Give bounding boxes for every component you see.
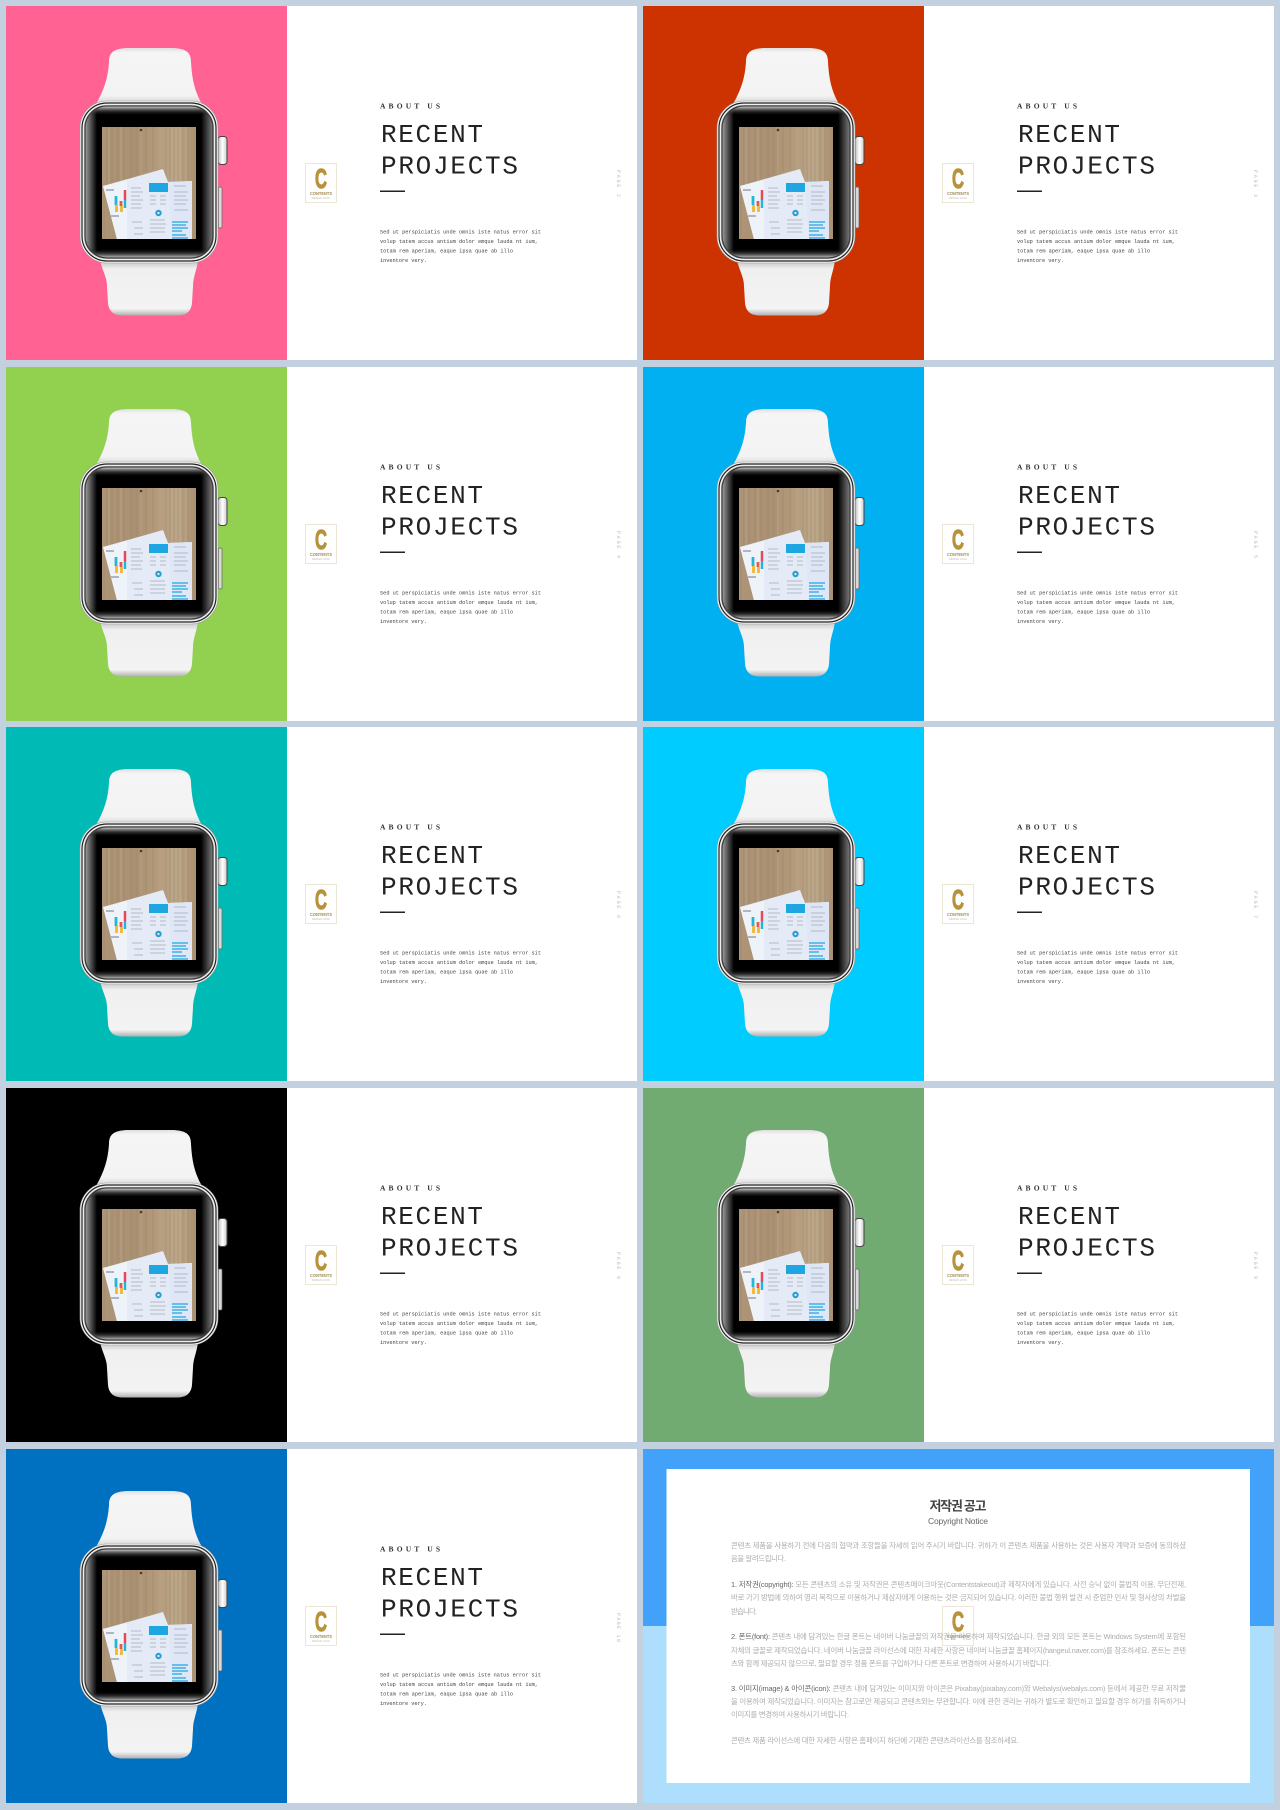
icon: logo: C xyxy=(952,163,964,194)
heading: RECENT xyxy=(1018,120,1120,150)
panel: black watch slide xyxy=(6,1088,637,1442)
panel: blue watch slide xyxy=(643,367,1274,721)
icon: logo: DESIGN LOOK xyxy=(312,1278,330,1282)
icon: logo: CONTENTS xyxy=(947,912,969,917)
body text xyxy=(1017,1312,1178,1346)
body text: Sed ut perspiciatis unde omnis iste natus error sit xyxy=(380,1672,541,1678)
colour block xyxy=(643,1088,924,1442)
page number: PAGE 5 xyxy=(1252,531,1258,558)
page number: PAGE 6 xyxy=(615,891,621,918)
clause 1: copyright: 바로 가기 방법에 의하여 영리 목적으로 이용하거나 제삼자에게 이용하는 것은 금지되어 있습니다. 이러한 불법 행위 발견 시 준엄한 민사 및 형사상의 처벌을 xyxy=(731,1593,1186,1602)
body text: volup tatem accus antium dolor emque lauda nt ium, xyxy=(1017,1321,1175,1327)
icon: logo: CONTENTS xyxy=(310,552,332,557)
colour block xyxy=(6,367,287,721)
icon: logo: DESIGN LOOK xyxy=(949,557,967,561)
body text xyxy=(380,1672,541,1707)
white content area xyxy=(287,1449,637,1803)
heading: RECENT xyxy=(381,120,483,150)
white content area xyxy=(287,6,637,360)
label: ABOUT US xyxy=(380,822,440,832)
panel: pink watch slide xyxy=(6,6,637,360)
body text: inventore very. xyxy=(380,258,427,264)
icon: logo: CONTENTS xyxy=(947,1634,969,1639)
body text: totam rem aperiam, eaque ipsa quae ab illo xyxy=(1017,1330,1150,1336)
heading: PROJECTS xyxy=(1018,152,1155,182)
body text: totam rem aperiam, eaque ipsa quae ab illo xyxy=(380,1692,513,1698)
icon: logo xyxy=(306,1606,336,1646)
intro paragraph xyxy=(731,1541,1186,1563)
body text: volup tatem accus antium dolor emque lauda nt ium, xyxy=(380,960,538,966)
page number: PAGE 9 xyxy=(1252,1252,1258,1279)
colour block xyxy=(643,367,924,721)
notice card xyxy=(666,1469,1250,1783)
body text: inventore very. xyxy=(1017,619,1064,625)
body text: inventore very. xyxy=(380,1340,427,1346)
notice subtitle: Copyright Notice xyxy=(928,1516,988,1526)
body text xyxy=(380,1312,541,1346)
icon: logo: CONTENTS xyxy=(310,1273,332,1278)
heading xyxy=(381,1202,518,1264)
label: ABOUT US xyxy=(1017,102,1077,110)
body text: totam rem aperiam, eaque ipsa quae ab illo xyxy=(380,610,513,616)
background bottom band xyxy=(643,1626,1274,1803)
rule xyxy=(1017,1272,1042,1274)
body text xyxy=(380,590,541,625)
icon: logo: DESIGN LOOK xyxy=(949,196,967,200)
body text: Sed ut perspiciatis unde omnis iste natus error sit xyxy=(380,590,541,596)
body text: inventore very. xyxy=(380,619,427,625)
clause 1: copyright: 받습니다. xyxy=(731,1607,757,1616)
icon: smartwatch xyxy=(717,1130,864,1398)
clause 2: font: 2. 폰트(font): 콘텐츠 내에 담겨있는 한글 폰트는 네이버 나눔글꼴의 저작권을 이용하여 제작되었습니다. 한글 외의 모든 폰트는 Windows System에 포함된 xyxy=(731,1632,1186,1641)
icon: smartwatch xyxy=(80,769,227,1036)
rule xyxy=(1017,552,1042,553)
icon: logo: CONTENTS xyxy=(310,191,332,196)
label: ABOUT US xyxy=(380,102,440,110)
body text: volup tatem accus antium dolor emque lauda nt ium, xyxy=(380,1321,538,1327)
white content area xyxy=(924,1088,1274,1442)
white content area xyxy=(924,727,1274,1081)
white content area xyxy=(924,367,1274,721)
heading: RECENT xyxy=(1018,841,1120,871)
icon: logo: CONTENTS xyxy=(947,552,969,557)
panel: cyan watch slide xyxy=(643,727,1274,1081)
body text xyxy=(380,950,541,985)
rule xyxy=(380,1634,405,1635)
colour block xyxy=(6,6,287,360)
icon: logo: DESIGN LOOK xyxy=(312,917,330,921)
heading: PROJECTS xyxy=(381,512,518,542)
icon: logo xyxy=(306,884,336,924)
body text: totam rem aperiam, eaque ipsa quae ab illo xyxy=(380,1330,513,1336)
notice title: 저작권 공고 xyxy=(930,1498,987,1514)
colour block xyxy=(643,727,924,1081)
body text: totam rem aperiam, eaque ipsa quae ab illo xyxy=(1017,610,1150,616)
body text xyxy=(380,230,541,264)
page number: PAGE 3 xyxy=(1252,170,1258,197)
white content area xyxy=(924,6,1274,360)
page number: PAGE 10 xyxy=(615,1613,621,1642)
rule xyxy=(380,552,405,553)
rule xyxy=(380,912,405,913)
panel: dark blue watch slide xyxy=(6,1449,637,1803)
heading: RECENT xyxy=(381,1202,483,1232)
page number: PAGE 7 xyxy=(1252,891,1258,918)
heading: PROJECTS xyxy=(381,1594,518,1624)
body text: inventore very. xyxy=(1017,979,1064,985)
label: ABOUT US xyxy=(1017,462,1077,472)
label: ABOUT US xyxy=(1017,1184,1077,1192)
heading xyxy=(381,1563,518,1624)
icon: logo: DESIGN LOOK xyxy=(312,196,330,200)
body text: volup tatem accus antium dolor emque lauda nt ium, xyxy=(1017,239,1175,245)
body text: volup tatem accus antium dolor emque lauda nt ium, xyxy=(380,239,538,245)
icon: smartwatch xyxy=(717,769,864,1036)
panel: orange watch slide xyxy=(643,6,1274,360)
clause 1: copyright xyxy=(731,1580,1186,1616)
heading: PROJECTS xyxy=(381,1234,518,1264)
page number: PAGE 2 xyxy=(615,170,621,197)
icon: logo xyxy=(942,1245,974,1284)
closing note: 콘텐츠 제품 라이선스에 대한 자세한 사항은 홈페이지 하단에 기재한 콘텐츠라이선스를 참조하세요. xyxy=(731,1736,1019,1745)
colour block xyxy=(6,1449,287,1803)
clause 2: font: 자체의 글꼴로 제작되었습니다. 네이버 나눔글꼴 라이선스에 대한 자세한 사항은 네이버 나눔글꼴 홈페이지(hangeul.naver.com)를 참조하세요. 폰트는 콘텐 xyxy=(731,1646,1186,1655)
heading: RECENT xyxy=(381,481,483,511)
label: ABOUT US xyxy=(380,462,440,472)
heading: PROJECTS xyxy=(1018,1234,1155,1264)
icon: logo: C xyxy=(315,163,327,194)
icon: smartwatch xyxy=(80,48,227,316)
label: ABOUT US xyxy=(380,1184,440,1192)
icon: logo: DESIGN LOOK xyxy=(312,557,330,561)
icon: smartwatch xyxy=(717,409,864,676)
icon: logo: DESIGN LOOK xyxy=(949,1278,967,1282)
clause 2: font xyxy=(731,1632,1186,1668)
colour block xyxy=(643,6,924,360)
body text: inventore very. xyxy=(380,1701,427,1707)
icon: logo: C xyxy=(315,1606,327,1637)
body text: Sed ut perspiciatis unde omnis iste natus error sit xyxy=(1017,950,1178,956)
icon: logo: DESIGN LOOK xyxy=(312,1639,330,1643)
body text: Sed ut perspiciatis unde omnis iste natus error sit xyxy=(1017,590,1178,596)
body text: Sed ut perspiciatis unde omnis iste natus error sit xyxy=(380,950,541,956)
icon: logo: C xyxy=(315,1245,327,1276)
icon: logo xyxy=(306,524,336,564)
white content area xyxy=(287,727,637,1081)
label: ABOUT US xyxy=(1017,822,1077,832)
icon: logo: DESIGN LOOK xyxy=(949,917,967,921)
rule xyxy=(1017,190,1042,192)
panel: teal watch slide xyxy=(6,727,637,1081)
page number: PAGE 8 xyxy=(615,1252,621,1279)
label: ABOUT US xyxy=(380,1544,440,1554)
body text: totam rem aperiam, eaque ipsa quae ab illo xyxy=(1017,248,1150,254)
heading: PROJECTS xyxy=(381,152,518,182)
icon: smartwatch xyxy=(80,1491,227,1758)
panel: copyright notice xyxy=(643,1449,1274,1803)
intro paragraph: 음을 알려드립니다. xyxy=(731,1554,786,1563)
heading xyxy=(1018,120,1155,182)
icon: logo: C xyxy=(952,1245,964,1276)
icon: logo: C xyxy=(952,884,964,915)
rule xyxy=(380,1272,405,1274)
white content area xyxy=(287,367,637,721)
clause 3: image and icon: 3. 이미지(image) & 아이콘(icon): 콘텐츠 내에 담겨있는 이미지와 아이콘은 Pixabay(pixabay.com)와 Webalys(webalys.com) 등에서 제공한 무료 저작물 xyxy=(731,1684,1186,1693)
intro paragraph: 콘텐츠 제품을 사용하기 전에 다음의 협약과 조항들을 자세히 읽어 주시기 바랍니다. 귀하가 이 콘텐츠 제품을 사용하는 것은 사용자 계약과 보증에 동의하셨 xyxy=(731,1541,1186,1550)
heading: PROJECTS xyxy=(1018,512,1155,542)
body text: totam rem aperiam, eaque ipsa quae ab illo xyxy=(1017,970,1150,976)
icon: logo xyxy=(942,884,974,924)
clause 1: copyright: 1. 저작권(copyright): 모든 콘텐츠의 소유 및 저작권은 콘텐츠메이크아웃(Contentstakeout)과 제작자에게 있습니다. 사전 승낙 없이 불법적 이용, 무단전재, xyxy=(731,1580,1186,1589)
body text: Sed ut perspiciatis unde omnis iste natus error sit xyxy=(1017,230,1178,236)
icon: logo xyxy=(942,1606,974,1646)
icon: smartwatch xyxy=(717,48,864,316)
body text xyxy=(1017,950,1178,985)
heading: RECENT xyxy=(381,1563,483,1593)
icon: smartwatch xyxy=(80,409,227,676)
body text: Sed ut perspiciatis unde omnis iste natus error sit xyxy=(380,230,541,236)
icon: logo: C xyxy=(952,524,964,555)
panel: sage watch slide xyxy=(643,1088,1274,1442)
clause 2: font: 츠와 함께 제공되지 않으므로, 필요할 경우 정품 폰트를 구입하거나 다른 폰트로 변경하여 사용하시기 바랍니다. xyxy=(731,1659,1051,1668)
white content area xyxy=(287,1088,637,1442)
icon: logo: CONTENTS xyxy=(310,1634,332,1639)
body text xyxy=(1017,590,1178,625)
clause 3: image and icon: 을 이용하여 제작되었습니다. 이미지는 참고로만 제공되고 콘텐츠와는 무관합니다. 이에 관한 권리는 귀하가 별도로 확인하고 필요할 경우 허가를 취득하거나 xyxy=(731,1697,1186,1706)
body text: Sed ut perspiciatis unde omnis iste natus error sit xyxy=(1017,1312,1178,1318)
icon: logo: CONTENTS xyxy=(947,1273,969,1278)
heading xyxy=(381,120,518,182)
body text: totam rem aperiam, eaque ipsa quae ab illo xyxy=(380,970,513,976)
body text: volup tatem accus antium dolor emque lauda nt ium, xyxy=(1017,960,1175,966)
icon: smartwatch xyxy=(80,1130,227,1398)
rule xyxy=(1017,912,1042,913)
body text: totam rem aperiam, eaque ipsa quae ab illo xyxy=(380,248,513,254)
heading xyxy=(1018,481,1155,542)
body text: volup tatem accus antium dolor emque lauda nt ium, xyxy=(1017,600,1175,606)
icon: logo xyxy=(306,1245,336,1284)
heading xyxy=(1018,1202,1155,1264)
clause 3: image and icon: 이미지를 변경하여 사용하시기 바랍니다. xyxy=(731,1710,849,1719)
clause 3: image and icon xyxy=(731,1684,1186,1719)
icon: logo: C xyxy=(315,884,327,915)
body text: Sed ut perspiciatis unde omnis iste natus error sit xyxy=(380,1312,541,1318)
icon: logo: CONTENTS xyxy=(947,191,969,196)
heading xyxy=(381,481,518,542)
body text: inventore very. xyxy=(1017,1340,1064,1346)
body text: inventore very. xyxy=(1017,258,1064,264)
icon: logo: C xyxy=(952,1606,964,1637)
rule xyxy=(380,190,405,192)
heading: RECENT xyxy=(1018,481,1120,511)
heading xyxy=(1018,841,1155,902)
heading xyxy=(381,841,518,902)
heading: PROJECTS xyxy=(1018,872,1155,902)
panel: green watch slide xyxy=(6,367,637,721)
background top band xyxy=(643,1449,1274,1626)
heading: PROJECTS xyxy=(381,872,518,902)
colour block xyxy=(6,727,287,1081)
body text: volup tatem accus antium dolor emque lauda nt ium, xyxy=(380,600,538,606)
heading: RECENT xyxy=(1018,1202,1120,1232)
icon: logo xyxy=(942,163,974,202)
page number: PAGE 4 xyxy=(615,531,621,558)
icon: logo: C xyxy=(315,524,327,555)
heading: RECENT xyxy=(381,841,483,871)
colour block xyxy=(6,1088,287,1442)
body text: inventore very. xyxy=(380,979,427,985)
body text: volup tatem accus antium dolor emque lauda nt ium, xyxy=(380,1682,538,1688)
icon: logo xyxy=(306,163,336,202)
body text xyxy=(1017,230,1178,264)
icon: logo xyxy=(942,524,974,564)
icon: logo: CONTENTS xyxy=(310,912,332,917)
